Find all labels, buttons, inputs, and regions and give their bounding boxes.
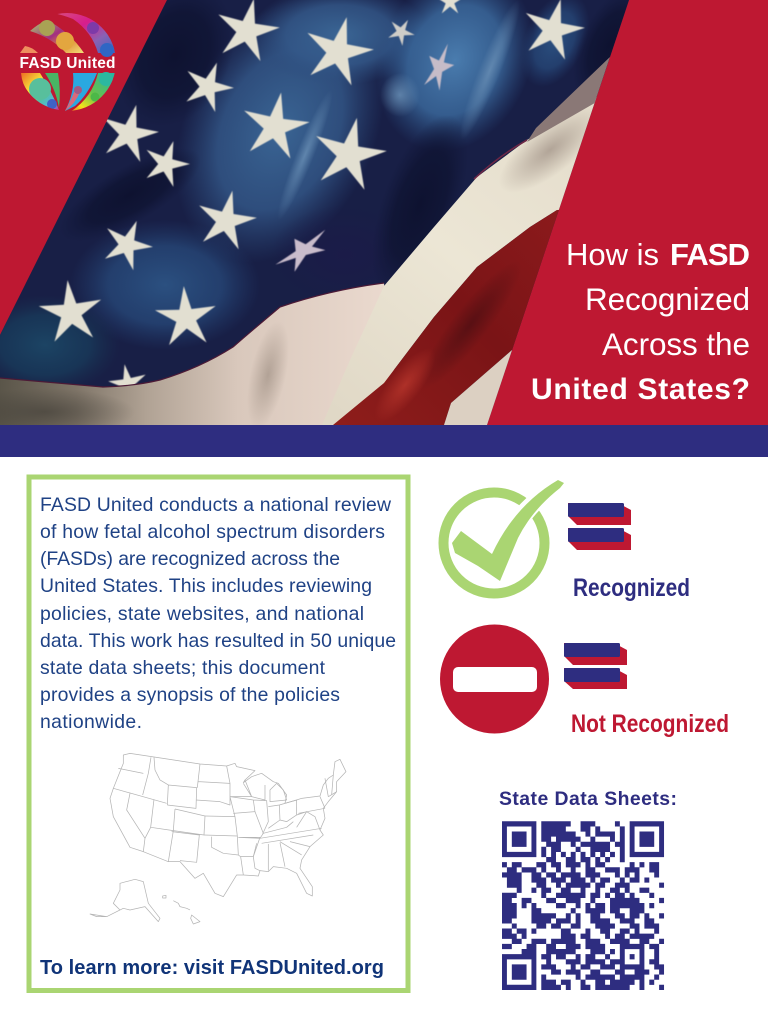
body text: provides a synopsis of the policies [40, 684, 340, 706]
title: How is [566, 237, 659, 272]
hero banner [0, 0, 768, 436]
logo: FASD United [20, 12, 116, 112]
title: United States? [531, 373, 750, 406]
green panel border [29, 477, 408, 990]
call to action: To learn more: visit FASDUnited.org [40, 957, 384, 979]
icon: equals sign [568, 503, 631, 550]
flag lower right white fold [444, 350, 512, 425]
body text [40, 494, 396, 733]
legend: recognized [444, 477, 690, 602]
body text: (FASDs) are recognized across the [40, 548, 340, 570]
icon: green check mark [444, 477, 566, 594]
logo wordmark: FASD United [20, 55, 116, 72]
red hero background [0, 0, 768, 425]
title: Recognized [585, 281, 750, 317]
body text: nationwide. [40, 711, 142, 733]
body text: data. This work has resulted in 50 unique [40, 630, 396, 652]
title: FASD [670, 237, 750, 272]
US states outline map [90, 753, 346, 924]
title [531, 237, 750, 406]
icon: no entry sign [440, 624, 549, 734]
flag stars [36, 0, 590, 403]
body text: of how fetal alcohol spectrum disorders [40, 521, 385, 543]
legend: not recognized [440, 624, 729, 738]
body text: state data sheets; this document [40, 657, 326, 679]
panel: review description [29, 477, 408, 990]
QR code [502, 824, 664, 987]
title: Across the [602, 326, 750, 362]
body text: FASD United conducts a national review [40, 494, 392, 516]
flag red stripe [333, 210, 559, 425]
label: not recognized: Not Recognized [571, 710, 729, 738]
navy divider band [0, 425, 768, 457]
icon: equals sign [564, 643, 627, 689]
photo: waving American flag [0, 0, 663, 436]
body text: policies, state websites, and national [40, 603, 364, 625]
state data sheets section [499, 788, 677, 987]
flag lower white fold [0, 283, 400, 425]
body text: United States. This includes reviewing [40, 575, 372, 597]
label: recognized: Recognized [573, 574, 690, 602]
flag white stripes [375, 58, 608, 390]
heading: state data sheets: State Data Sheets: [499, 788, 677, 810]
